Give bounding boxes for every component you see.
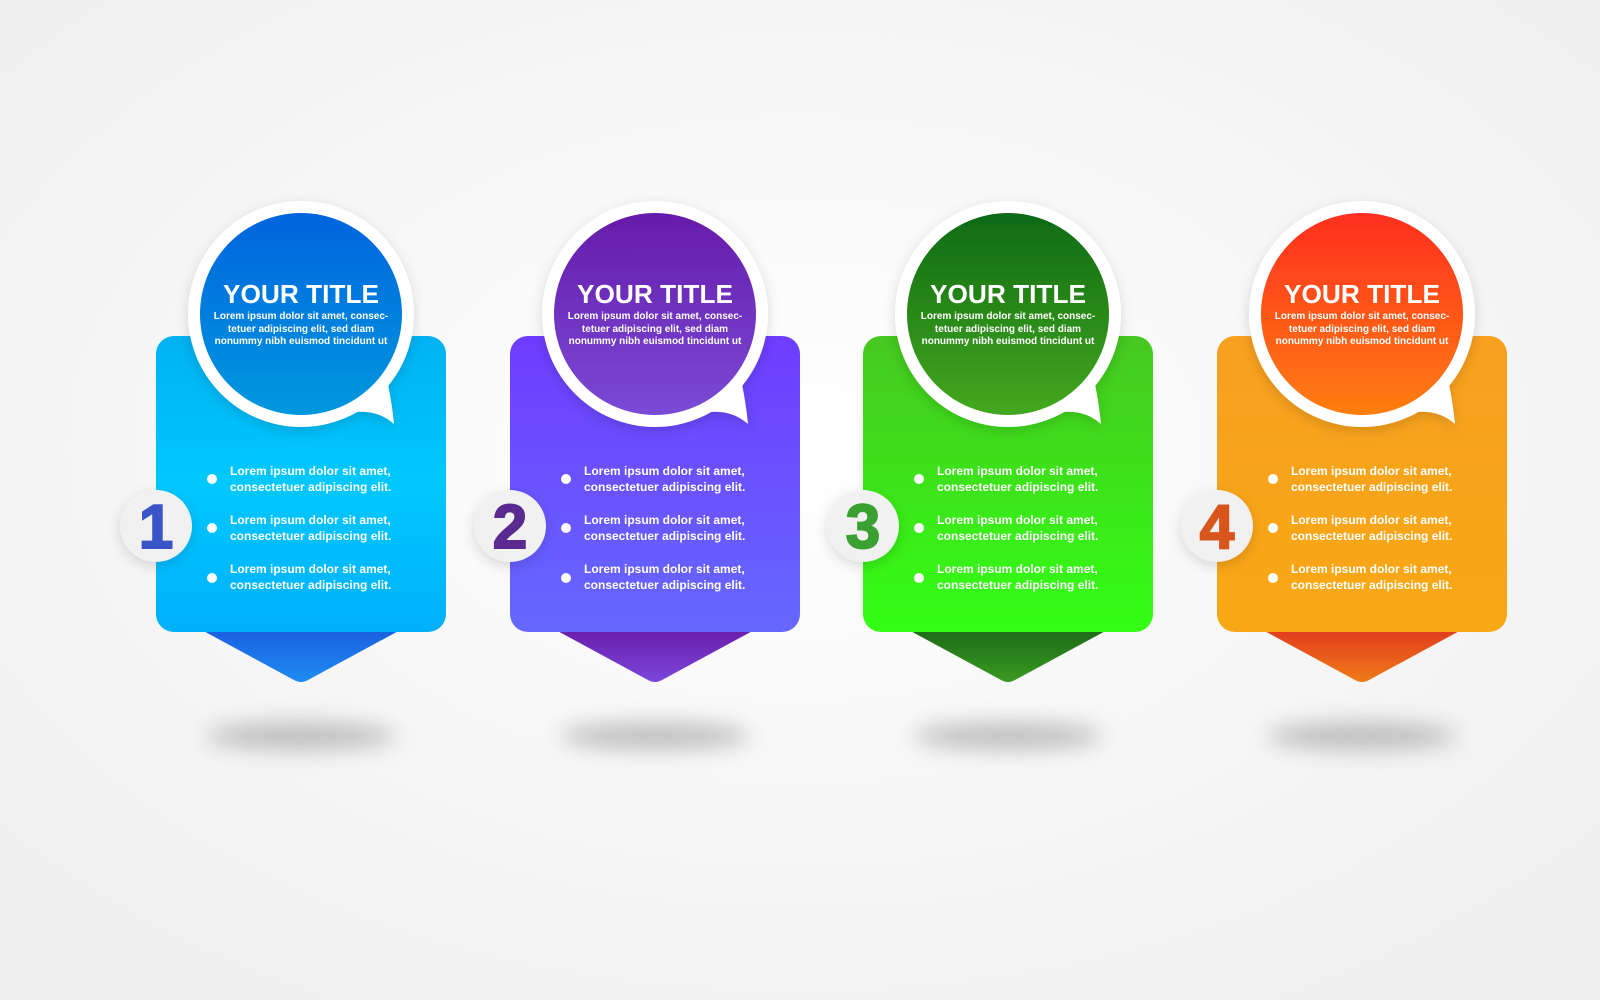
bullet list: Lorem ipsum dolor sit amet, — [937, 464, 1098, 478]
bullet list: Lorem ipsum dolor sit amet, — [937, 513, 1098, 527]
card 4 — [1181, 201, 1507, 750]
bullet list: consectetuer adipiscing elit. — [937, 578, 1098, 592]
title circle — [895, 201, 1121, 427]
bullet list: consectetuer adipiscing elit. — [584, 578, 745, 592]
title circle: tetuer adipiscing elit, sed diam — [582, 324, 728, 335]
arrow — [905, 628, 1111, 682]
title circle: Lorem ipsum dolor sit amet, consec- — [1275, 311, 1449, 322]
bullet list: Lorem ipsum dolor sit amet, — [230, 464, 391, 478]
card body — [1217, 336, 1507, 632]
title circle — [542, 201, 768, 427]
number badge: 4 — [1200, 493, 1235, 562]
bullet list: consectetuer adipiscing elit. — [1291, 480, 1452, 494]
bullet list: Lorem ipsum dolor sit amet, — [230, 562, 391, 576]
title circle: nonummy nibh euismod tincidunt ut — [922, 336, 1095, 347]
bullet list: consectetuer adipiscing elit. — [230, 578, 391, 592]
shadow — [913, 722, 1103, 750]
number badge — [1181, 490, 1253, 562]
card body — [510, 336, 800, 632]
shadow — [206, 722, 396, 750]
title circle: tetuer adipiscing elit, sed diam — [1289, 324, 1435, 335]
card 1 — [120, 201, 446, 750]
title circle: Lorem ipsum dolor sit amet, consec- — [568, 311, 742, 322]
bullet list: Lorem ipsum dolor sit amet, — [584, 464, 745, 478]
bullet list: Lorem ipsum dolor sit amet, — [937, 562, 1098, 576]
bullet list: Lorem ipsum dolor sit amet, — [584, 513, 745, 527]
bullet list: Lorem ipsum dolor sit amet, — [584, 562, 745, 576]
number badge — [827, 490, 899, 562]
title circle — [188, 201, 414, 427]
bullet list — [561, 464, 745, 592]
shadow — [1267, 722, 1457, 750]
title circle: YOUR TITLE — [930, 279, 1086, 309]
number badge: 2 — [493, 493, 527, 562]
card body — [863, 336, 1153, 632]
title circle: Lorem ipsum dolor sit amet, consec- — [214, 311, 388, 322]
number badge — [474, 490, 546, 562]
number badge — [120, 490, 192, 562]
shadow — [560, 722, 750, 750]
card 3 — [827, 201, 1153, 750]
bullet list: consectetuer adipiscing elit. — [584, 529, 745, 543]
bullet list — [1268, 464, 1452, 592]
title circle: nonummy nibh euismod tincidunt ut — [569, 336, 742, 347]
number badge: 3 — [846, 493, 880, 562]
title circle — [1249, 201, 1475, 427]
number badge: 1 — [139, 493, 173, 562]
title circle: nonummy nibh euismod tincidunt ut — [1276, 336, 1449, 347]
title circle: tetuer adipiscing elit, sed diam — [935, 324, 1081, 335]
bullet list: Lorem ipsum dolor sit amet, — [1291, 464, 1452, 478]
bullet list: consectetuer adipiscing elit. — [230, 480, 391, 494]
bullet list: Lorem ipsum dolor sit amet, — [230, 513, 391, 527]
title circle: YOUR TITLE — [577, 279, 733, 309]
title circle: YOUR TITLE — [223, 279, 379, 309]
bullet list: consectetuer adipiscing elit. — [937, 529, 1098, 543]
bullet list: Lorem ipsum dolor sit amet, — [1291, 562, 1452, 576]
arrow — [1259, 628, 1465, 682]
bullet list: consectetuer adipiscing elit. — [937, 480, 1098, 494]
bullet list: consectetuer adipiscing elit. — [230, 529, 391, 543]
arrow — [552, 628, 758, 682]
title circle: Lorem ipsum dolor sit amet, consec- — [921, 311, 1095, 322]
title circle: nonummy nibh euismod tincidunt ut — [215, 336, 388, 347]
card 2 — [474, 201, 800, 750]
title circle: YOUR TITLE — [1284, 279, 1440, 309]
bullet list: consectetuer adipiscing elit. — [584, 480, 745, 494]
card body — [156, 336, 446, 632]
bullet list: consectetuer adipiscing elit. — [1291, 578, 1452, 592]
bullet list: Lorem ipsum dolor sit amet, — [1291, 513, 1452, 527]
title circle: tetuer adipiscing elit, sed diam — [228, 324, 374, 335]
bullet list — [914, 464, 1098, 592]
bullet list — [207, 464, 391, 592]
arrow — [198, 628, 404, 682]
bullet list: consectetuer adipiscing elit. — [1291, 529, 1452, 543]
